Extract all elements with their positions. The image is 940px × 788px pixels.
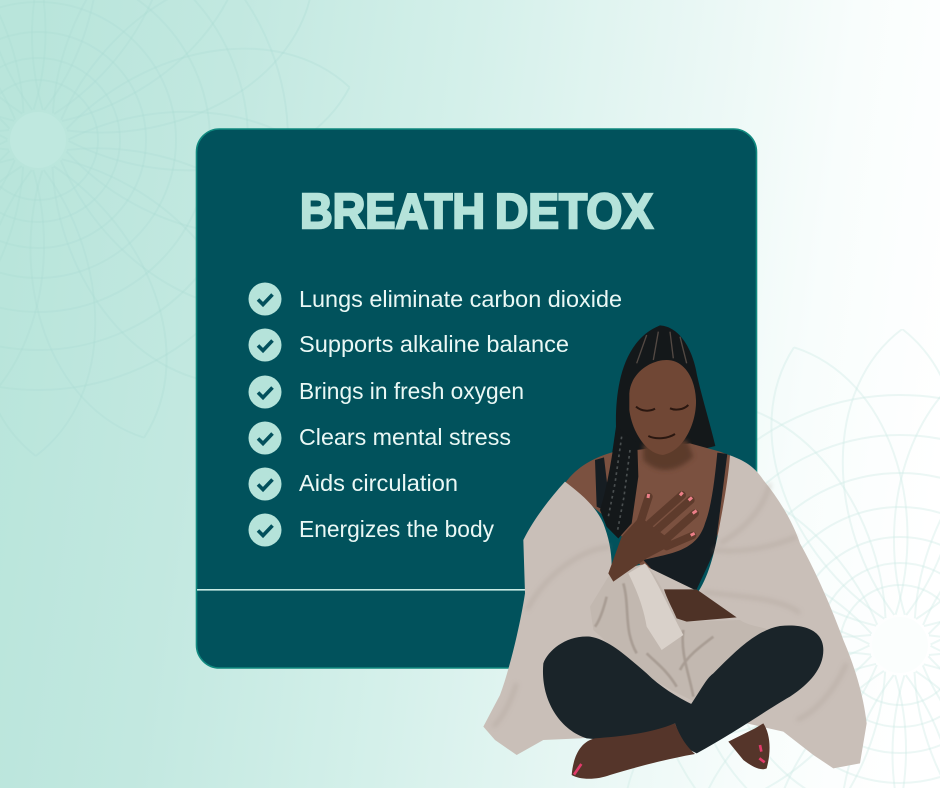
item: energizes: Energizes the body — [299, 516, 494, 542]
item: lungs: Lungs eliminate carbon dioxide — [299, 286, 622, 312]
illustration: woman meditating with hand on chest — [483, 325, 867, 779]
closed eyes and mouth — [636, 405, 688, 438]
neck shadow — [643, 440, 693, 470]
item: oxygen — [248, 376, 524, 408]
hand on chest — [608, 495, 695, 582]
title: BREATH — [300, 185, 485, 239]
drape light band — [628, 563, 683, 650]
decorative mandala: bottom right — [584, 329, 940, 788]
fingernails — [648, 492, 697, 535]
skin: shoulders and chest — [565, 443, 733, 570]
fringed shawl drape — [590, 565, 768, 703]
black leggings — [543, 626, 823, 753]
item: oxygen: Brings in fresh oxygen — [299, 378, 524, 404]
shawl fold shading — [493, 483, 847, 727]
item: circulation — [248, 468, 458, 500]
divider line — [197, 589, 527, 591]
checklist — [248, 282, 622, 546]
item: stress — [248, 422, 511, 454]
item: stress: Clears mental stress — [299, 424, 511, 450]
painted toenails — [574, 745, 765, 775]
crossed feet — [572, 723, 770, 779]
card background — [196, 129, 756, 668]
item: lungs — [248, 282, 622, 316]
shawl — [483, 455, 867, 768]
back hair — [600, 325, 715, 538]
item: alkaline — [248, 328, 569, 362]
item: circulation: Aids circulation — [299, 470, 458, 496]
braid partings — [637, 332, 687, 363]
title: DETOX — [495, 185, 653, 239]
bra — [595, 453, 727, 589]
drape fur texture — [595, 583, 713, 697]
face — [629, 360, 696, 455]
item: energizes — [248, 514, 494, 546]
panel: breath detox card — [196, 129, 756, 668]
item: alkaline: Supports alkaline balance — [299, 331, 569, 357]
decorative mandala: top left — [0, 0, 356, 460]
left braids over shoulder — [600, 427, 638, 538]
belly hand — [664, 589, 737, 622]
